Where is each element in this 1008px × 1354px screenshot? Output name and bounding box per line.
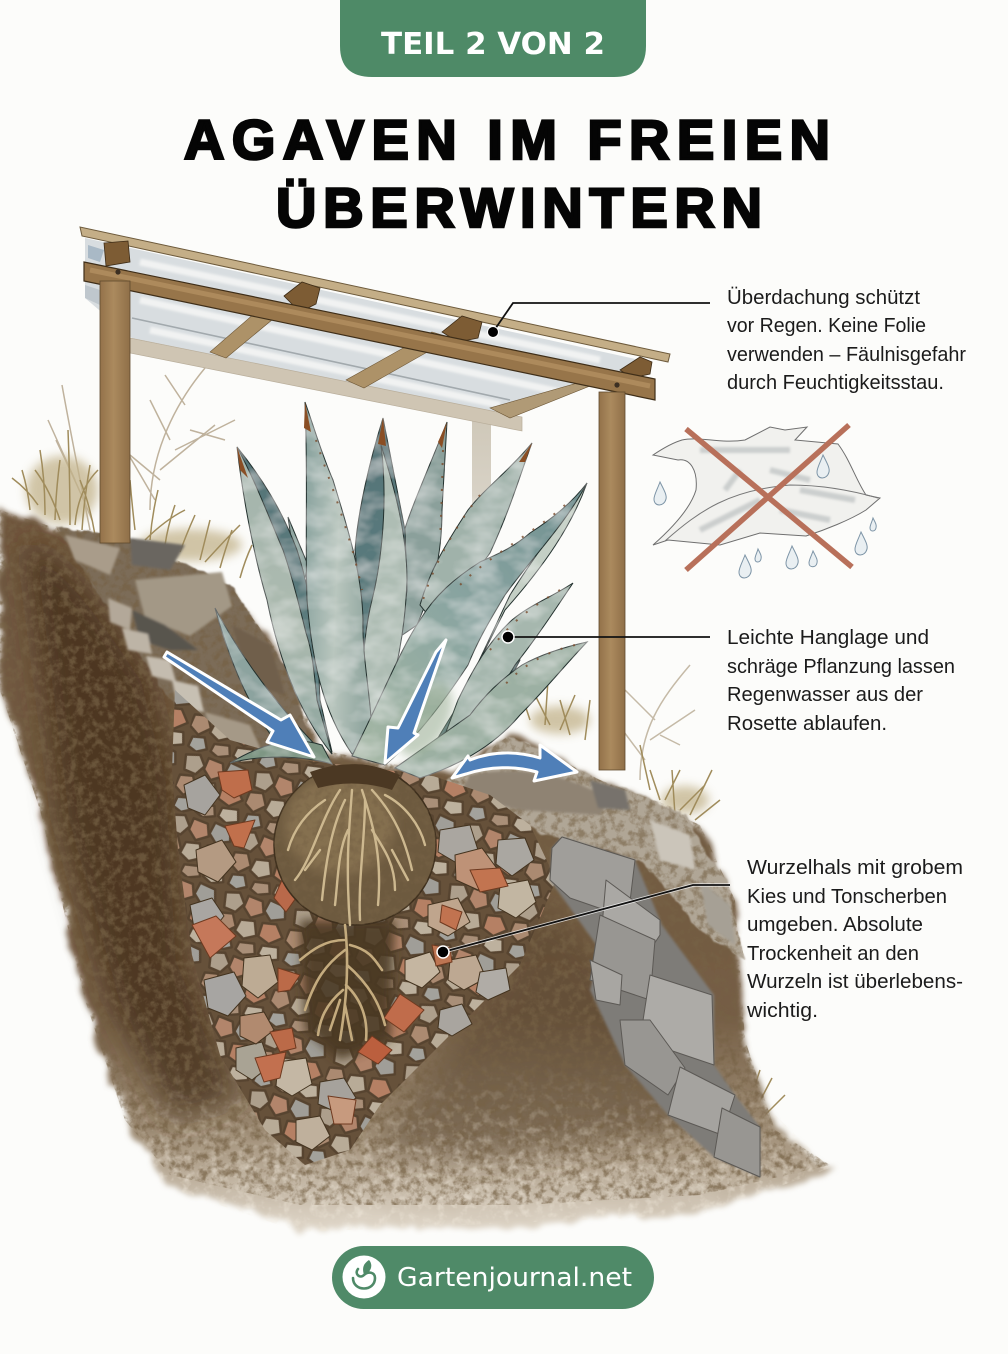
illustration: gravel and shard drainage pit <box>172 690 556 1165</box>
arrow: water flows in from the slope <box>164 652 314 757</box>
footer pill: Gartenjournal.net <box>397 1263 632 1293</box>
darker soil right of the gravel <box>370 900 690 1160</box>
illustration: rocky slope right <box>440 735 745 960</box>
leaf A <box>237 447 332 754</box>
thorn teeth along the leaves <box>316 440 575 690</box>
leaf D <box>395 422 447 640</box>
leaf H <box>395 642 587 778</box>
leaf G dark base <box>432 650 520 748</box>
illustration: dry twigs behind the slope <box>48 368 695 780</box>
pergola: rear post <box>472 420 491 515</box>
header tab: TEIL 2 VON 2 <box>381 27 605 62</box>
pergola: rafter blocks <box>104 241 652 378</box>
callout: slope: schräge Pflanzung lassen <box>727 656 955 678</box>
icon: plant in pot <box>342 1256 386 1298</box>
illustration: root ball <box>274 764 436 1040</box>
leaf F pale back <box>470 483 587 680</box>
callout: slope: Rosette ablaufen. <box>727 713 887 735</box>
callout: roof: Überdachung schützt <box>727 287 920 309</box>
callout: gravel: wichtig. <box>746 1000 818 1022</box>
pergola: left post <box>100 281 130 543</box>
title <box>184 108 830 239</box>
stones <box>184 775 536 1150</box>
callout: slope: Leichte Hanglage und <box>727 627 929 649</box>
terracotta shards <box>192 770 508 1124</box>
dark soil left of the gravel <box>25 540 240 1120</box>
small left leaf <box>215 608 322 752</box>
low left leaf <box>230 741 332 764</box>
leaf C dark <box>355 418 407 735</box>
leaf C light <box>362 445 407 750</box>
red cross <box>686 425 852 570</box>
pergola: rafters <box>210 300 625 418</box>
taproot <box>300 925 385 1040</box>
leaf F <box>352 483 587 765</box>
callout: gravel: Kies und Tonscherben <box>747 886 947 908</box>
pergola: top rail <box>80 227 670 362</box>
thorn tips on the leaves <box>237 402 532 478</box>
pergola: pale rear beam <box>130 338 522 431</box>
crossed out plastic sheet icon <box>653 425 880 578</box>
leaf E <box>420 443 532 625</box>
pergola: right post <box>599 392 625 770</box>
callout: gravel: umgeben. Absolute <box>747 914 923 936</box>
callout: roof <box>488 287 966 394</box>
title: ÜBERWINTERN <box>276 176 762 239</box>
pergola: main front beam <box>84 262 655 400</box>
title: AGAVEN IM FREIEN <box>184 108 830 171</box>
callout: gravel: Wurzelhals mit grobem <box>747 857 963 879</box>
leaf G <box>440 583 573 748</box>
small back leaf <box>288 517 308 600</box>
leaf A dark side <box>237 447 332 752</box>
illustration: dry grass <box>12 430 785 1135</box>
leaf shading <box>386 674 464 766</box>
illustration: rocky slope left <box>55 526 315 755</box>
water drops <box>654 455 876 578</box>
illustration: soil cross-section <box>0 505 835 1232</box>
arrow: water drains downhill <box>452 745 577 781</box>
callout: roof: vor Regen. Keine Folie <box>727 315 926 337</box>
leaf B <box>305 402 372 754</box>
callout: gravel: Wurzeln ist überlebens- <box>747 971 963 993</box>
footer pill <box>332 1246 654 1309</box>
header tab <box>340 0 646 77</box>
agave rosette <box>215 402 587 778</box>
callout: slope <box>502 627 955 735</box>
pergola: translucent roof panel <box>85 238 640 412</box>
illustration: retaining wall stones <box>550 837 760 1177</box>
arrow: water runs down the leaf <box>385 640 446 763</box>
callout: gravel <box>437 857 963 1022</box>
callout: roof: durch Feuchtigkeitsstau. <box>727 372 944 394</box>
callout: roof: verwenden – Fäulnisgefahr <box>727 344 966 366</box>
callout: gravel: Trockenheit an den <box>747 943 919 965</box>
dark pocket around the taproot <box>300 920 395 1060</box>
callout: slope: Regenwasser aus der <box>727 684 923 706</box>
